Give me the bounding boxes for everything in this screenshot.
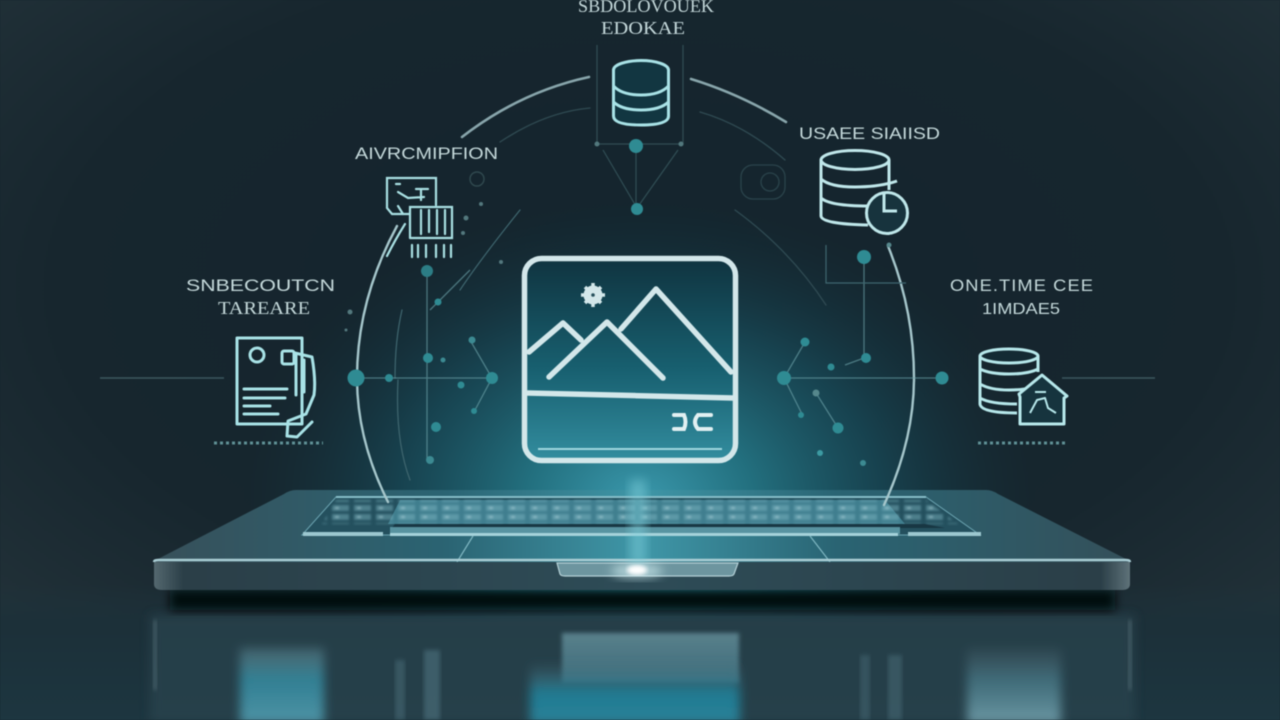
label: one-time fee (950, 276, 1094, 318)
network: right (777, 242, 948, 466)
image frame (524, 258, 736, 460)
dotted line: right (978, 442, 1065, 444)
trackpad lines (457, 536, 830, 562)
keyboard (302, 497, 981, 536)
divider (527, 393, 733, 398)
label: subscription (186, 276, 335, 318)
label: usage based: USAEE SIAIISD (799, 124, 940, 143)
top label (578, 0, 714, 38)
label: one-time fee: ONE.TIME CEE (950, 276, 1094, 295)
laptop shadow (170, 590, 1115, 610)
icon: database with house (980, 349, 1067, 424)
laptop notch (557, 563, 738, 576)
label: subscription: SNBECOUTCN (186, 276, 335, 295)
dotted line: left (214, 442, 323, 444)
icon: database with clock (821, 150, 908, 234)
laptop front edge (154, 562, 1130, 590)
top label: EDOKAE (601, 18, 685, 38)
label: subscription: TAREARE (218, 298, 310, 318)
icon: document and hand (237, 338, 315, 437)
label: authorization: AIVRCMIPFION (355, 144, 498, 163)
scattered particles, upper left (344, 202, 503, 332)
hologram arcs (357, 77, 914, 505)
top icon: database (614, 60, 668, 125)
laptop (154, 480, 1130, 610)
connector lines to outer icons (100, 377, 1155, 379)
faint gear outline, upper right (741, 165, 785, 199)
reflective floor (0, 585, 1280, 720)
label: one-time fee: 1IMDAE5 (982, 301, 1060, 318)
central image icon (524, 258, 736, 460)
icon: card and barcode (387, 172, 484, 257)
link glyph (674, 415, 711, 429)
center light flare (611, 480, 663, 578)
laptop deck (155, 490, 1129, 563)
top connector frame (594, 45, 684, 215)
bottom line (538, 448, 722, 450)
network: left (348, 265, 498, 464)
sun (581, 283, 605, 307)
mountains (529, 289, 731, 378)
